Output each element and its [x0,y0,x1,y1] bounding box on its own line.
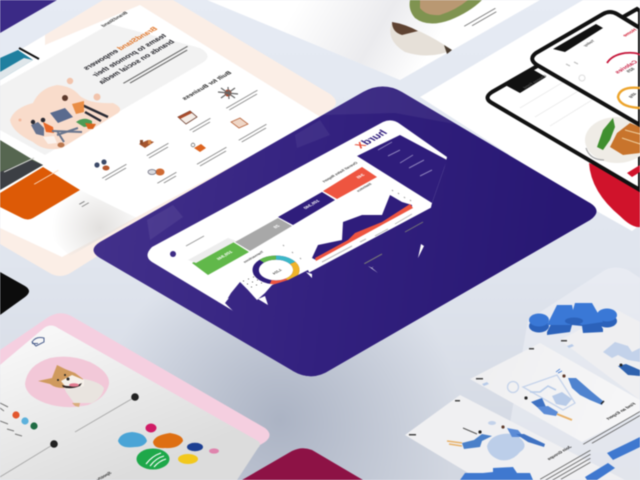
small plant [58,142,64,148]
person two torso [43,122,54,133]
title: Join Groups [545,445,573,461]
sparkle [556,369,562,373]
puzzle decor [603,342,640,362]
tile: grey [235,218,292,251]
piece side [529,310,617,335]
slider: upper [75,393,139,432]
copy [540,450,601,480]
small cloud [488,421,496,425]
tile: red [323,167,377,199]
donut chart [235,245,317,295]
orange section [0,167,80,220]
dog muzzle [61,375,84,390]
person heads [31,118,45,124]
sidebar menu lines [378,142,432,176]
legend text [0,403,22,436]
mountain shards [218,244,424,305]
dog eyes [57,374,66,381]
home link: Home [621,28,639,38]
laptop [50,108,73,123]
person head [62,95,68,101]
piece top face [547,303,603,325]
chevrons [566,62,578,66]
header logo: BrandStand [100,11,130,28]
dot small [18,118,22,122]
header text: Choose Food [521,74,548,90]
avatar [170,251,176,257]
heading: BrandStand empowers [80,25,160,71]
icon: people [94,159,110,170]
list lines [520,78,592,126]
person kneeling legs [557,414,572,420]
food plate [585,117,640,163]
noodle highlights [622,130,640,144]
small label [482,382,489,386]
inner screen [0,326,260,480]
icon: bag [191,143,206,152]
small label [567,344,574,348]
tile: green [192,242,249,275]
ring [618,88,640,108]
panel: black card [0,272,29,315]
feature text [197,147,230,166]
app blob: pink [209,448,219,454]
status bar [561,340,567,342]
search bar [188,238,236,263]
dog neck [72,403,80,407]
seated legs [52,128,82,142]
screen: front [405,395,625,480]
person standing legs [516,434,545,447]
photo: dogs [410,0,482,24]
person kneeling top [531,398,546,407]
panel: main dashboard purple card [94,86,596,376]
photo: portrait hair [392,22,418,35]
graph line [530,386,556,392]
chart title: Statistics [356,182,373,192]
hero section [0,24,208,155]
greens [597,118,615,150]
caption [464,8,499,28]
photo: pale stripe [4,158,34,172]
person kneeling skirt [537,406,558,416]
photo: road [0,160,43,190]
panel: crimson card [242,448,363,480]
feature text [145,143,172,158]
gauge [607,53,640,63]
person standing head [501,425,505,429]
feature text [238,124,270,142]
small circle [579,75,585,81]
logo: hurdX [352,128,391,151]
app blob: navy [187,443,203,451]
wand [463,428,477,434]
corner: dark purple card at top left [0,0,57,33]
pot [85,123,96,129]
piece left knob [529,314,549,326]
dog head [38,365,83,388]
chart: area [312,195,413,261]
table: recent orders [362,222,423,268]
person kneeling head [524,396,528,400]
dog mouth [62,383,82,388]
panel: phones card [420,0,640,231]
page body [0,5,322,257]
heading line 2: teams to promote their [90,32,169,78]
chart board [523,375,575,410]
person standing head [562,374,566,378]
title: Find an Expert [605,402,637,421]
person standing [568,378,603,405]
logo [32,338,44,346]
status bars [409,400,460,436]
calories value: 825 [625,67,636,73]
icon: network [218,87,238,99]
small label [78,200,89,207]
feature text [226,90,261,110]
person standing legs [82,105,108,121]
piece right knob [597,308,617,322]
red circle [589,163,640,227]
sidebar [357,135,447,203]
mountain silhouette [225,160,596,376]
app blob: orange [153,433,183,448]
feature text [102,164,130,180]
puzzle decor [552,392,572,406]
person flying legs [447,441,462,446]
tile: purple: 105,340 [302,199,321,210]
legend dots [12,411,38,430]
feature text [189,118,214,132]
panel: pink pet card [0,313,270,480]
app blob: blue [118,432,147,447]
puzzle: bottom [460,467,533,480]
panel: puzzle onboarding screens [405,268,640,480]
tile: purple [278,192,335,225]
tile: red: 345 [355,173,366,180]
phone: back [488,9,640,190]
dots [67,78,73,84]
facet highlight left [147,205,183,240]
button: blue lower [585,463,615,480]
donut title: Transactions [242,250,265,264]
illustration: team [10,78,120,149]
feature text [157,172,180,185]
person feet [601,401,604,404]
cloud outline [508,382,518,392]
heading line 3: brands on social media [95,38,177,86]
app blob: magenta [146,424,156,432]
title: Today [581,39,596,48]
black divider [19,48,39,59]
person standing shirt [507,428,524,437]
screenshot: blue page [0,50,33,80]
screenshot: white bar [0,58,33,80]
donut value: 1,224 [272,268,283,275]
facet highlight mid [295,120,330,148]
chart axis ticks [283,190,411,259]
page lower grey section [30,190,137,256]
hero copy [123,46,191,85]
plant [76,119,92,127]
copy [583,411,640,446]
notch [553,24,603,52]
icon: spotify [136,448,170,470]
dog tongue [69,383,79,387]
section title: Built for Business [180,70,234,102]
mini calendar [243,277,262,287]
icon: puzzle piece [529,303,617,335]
app blob: yellow [178,454,198,464]
dot [94,94,100,100]
dashboard title: Overall Sales Report [320,161,359,183]
icon: books [139,140,154,148]
dog body [63,379,104,403]
panel: top centre card [207,0,540,80]
icon: tablet [231,118,248,128]
person head [620,364,622,366]
person flying body [462,434,492,449]
screen: middle [470,343,640,446]
dashboard window [148,120,447,312]
phone: front [532,12,640,125]
ring value: 45g [627,92,638,98]
slider: lower [0,440,58,477]
button: blue [607,437,640,460]
photo: portrait shadow [444,45,452,54]
status bars [476,348,534,380]
orange section text [34,170,59,184]
icon: calendar [178,111,197,124]
photo: dog detail [420,0,468,15]
puzzle decor [487,434,525,460]
photo strip [0,140,43,190]
skirt [43,136,57,144]
photo: round portrait [390,22,452,56]
chart x labels [322,214,412,262]
panel: peach landing page card [0,0,336,276]
header label [186,236,204,246]
person flying head [478,430,482,434]
dog portrait [25,357,109,407]
calories: Calories [614,60,640,75]
icon: gadget [148,168,164,176]
dog nose [66,378,70,380]
notch [505,69,546,93]
piece hole [565,318,583,324]
red button [627,165,640,177]
blob [10,85,120,149]
tile: grey: 28 [272,224,281,229]
noodles [610,123,640,155]
tile: green: 109,846 [215,250,234,261]
person seated torso [31,122,44,136]
facet highlight [322,86,455,124]
person shirt [72,101,84,114]
screen: back right [560,310,640,400]
plate rim [586,148,604,160]
person [618,364,640,376]
